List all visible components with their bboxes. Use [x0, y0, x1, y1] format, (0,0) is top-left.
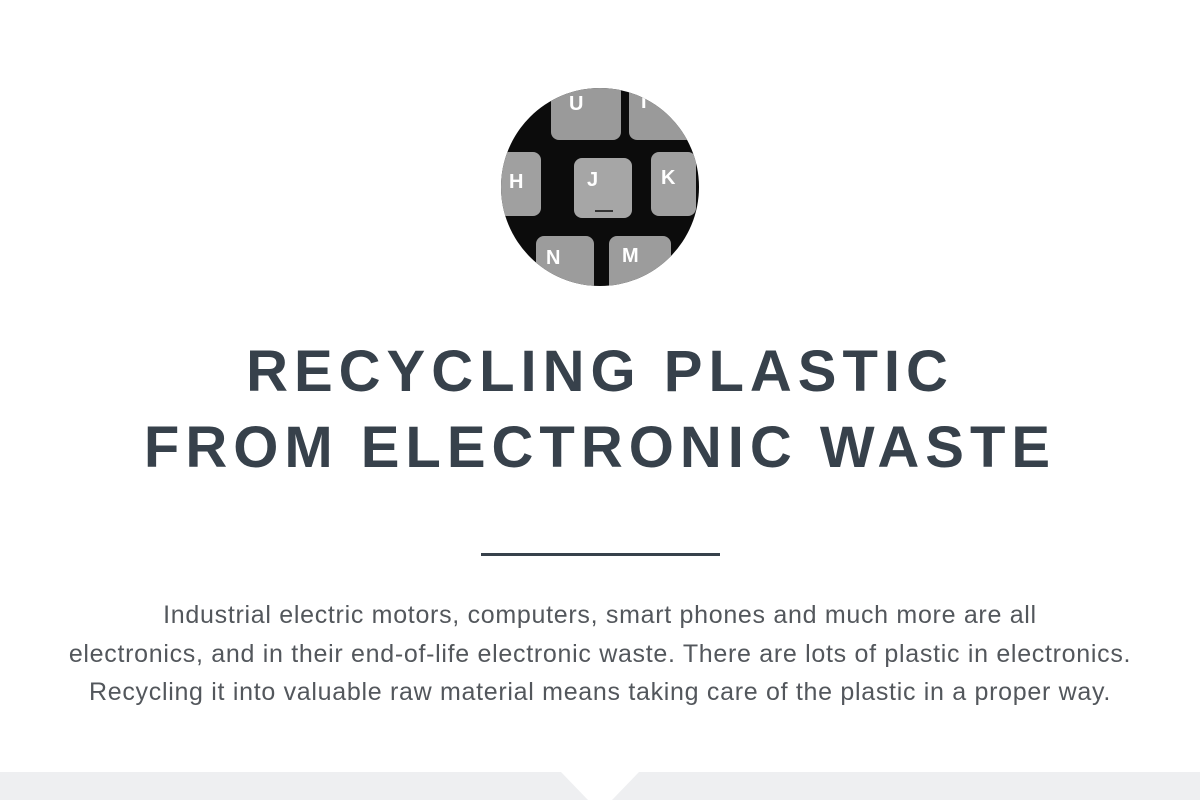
title [144, 339, 1056, 480]
bottom band with notch [0, 772, 1200, 800]
intro paragraph: electronics, and in their end-of-life electronic waste. There are lots of plastic in electronics. [69, 640, 1131, 668]
icon: keyboard photo circle: I [641, 91, 647, 113]
intro paragraph [69, 601, 1131, 706]
icon: keyboard photo circle: K [661, 167, 676, 189]
icon: keyboard photo circle: J [587, 169, 598, 191]
intro paragraph: Recycling it into valuable raw material means taking care of the plastic in a proper way. [89, 678, 1111, 706]
title: RECYCLING PLASTIC [246, 339, 954, 404]
title: FROM ELECTRONIC WASTE [144, 415, 1056, 480]
icon: keyboard photo circle: U [569, 93, 583, 115]
intro paragraph: Industrial electric motors, computers, smart phones and much more are all [163, 601, 1037, 629]
icon: keyboard photo circle: M [622, 245, 639, 267]
icon: keyboard photo circle [501, 88, 699, 286]
icon: keyboard photo circle: H [509, 171, 523, 193]
icon: keyboard photo circle: N [546, 247, 560, 269]
